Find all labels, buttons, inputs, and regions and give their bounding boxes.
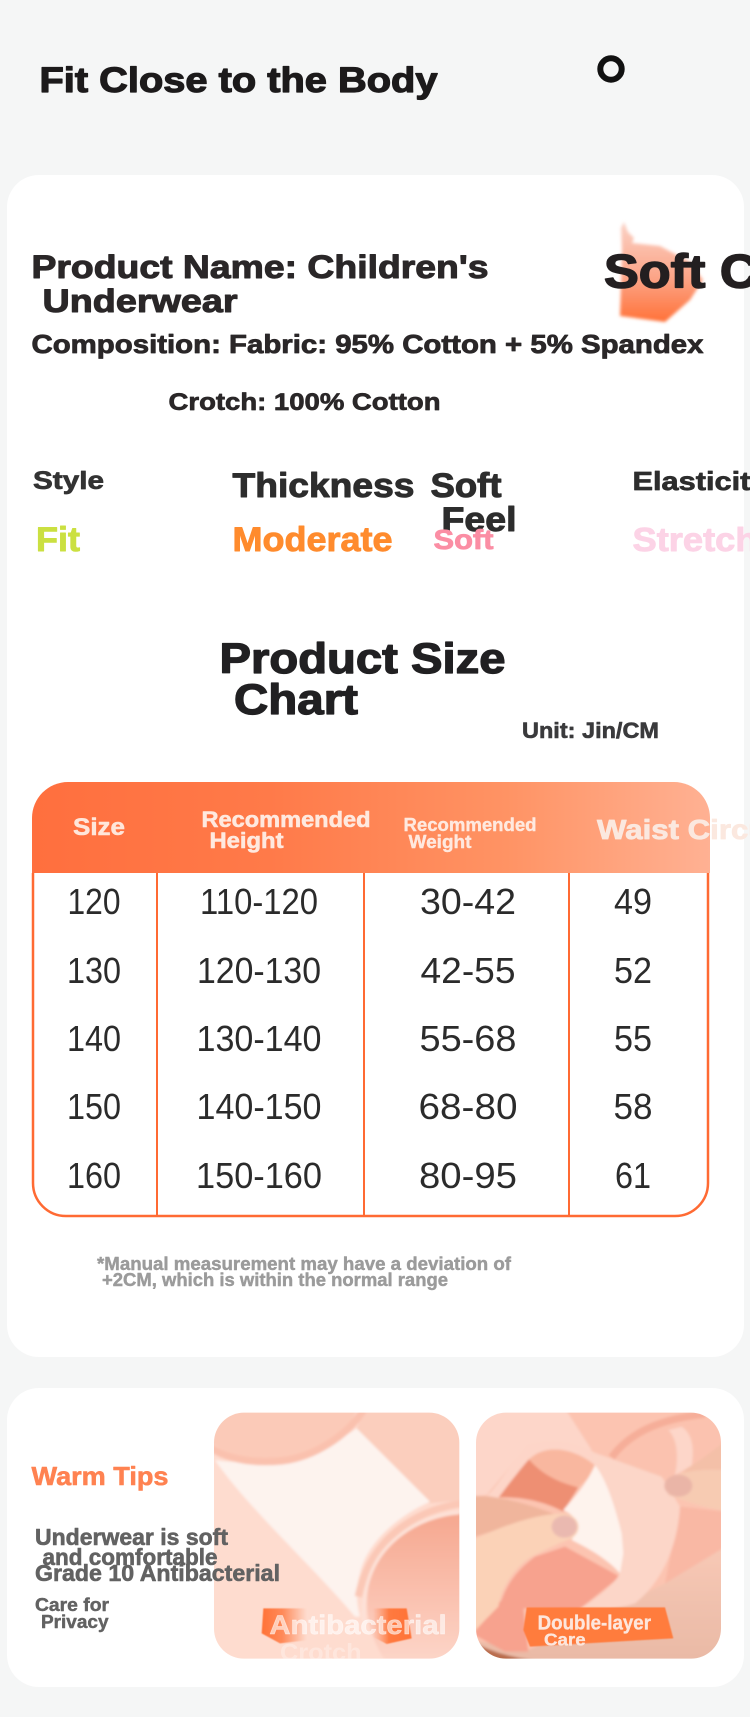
table row 120: 110-120 (200, 881, 318, 922)
photo: double-layer care (472, 1408, 728, 1663)
tip: care for privacy (35, 1594, 109, 1632)
attribute: soft feel: Soft (430, 467, 502, 505)
orange label strip (262, 1608, 412, 1644)
card background (7, 175, 744, 1357)
attribute: thickness (232, 467, 414, 559)
table row 160: 61 (615, 1155, 651, 1196)
label text: Antibacterial (269, 1610, 447, 1640)
table row 120: 120 (68, 881, 120, 922)
icon: orange fabric swatch (620, 222, 703, 322)
table row 140 (67, 1018, 652, 1059)
header labels: Size (73, 814, 125, 841)
table row 120: 49 (614, 881, 652, 922)
size table (32, 782, 750, 1216)
attribute: soft feel: Feel (442, 501, 516, 539)
table row 150: 150 (67, 1086, 121, 1127)
measurement note: *Manual measurement may have a deviation of (97, 1254, 512, 1274)
table row 130 (67, 950, 652, 991)
table header band (32, 782, 710, 873)
table row 140: 130-140 (196, 1018, 322, 1059)
photo fabric and hands drawing (472, 1408, 728, 1663)
attribute: elasticity: Elasticity (632, 466, 750, 496)
label text (538, 1614, 651, 1646)
panel: warm tips (7, 1388, 744, 1687)
table row 150: 140-150 (196, 1086, 322, 1127)
photo: antibacterial crotch (210, 1410, 463, 1667)
product name heading: Product Name: Children's (32, 249, 488, 285)
attribute: style: Style (33, 467, 104, 495)
product name heading: Underwear (42, 283, 238, 319)
attribute: soft feel: Soft (434, 524, 494, 555)
table row 130: 130 (67, 950, 121, 991)
label text: Crotch (280, 1640, 362, 1667)
table row 130: 120-130 (197, 950, 321, 991)
table row 130: 42-55 (420, 950, 516, 991)
orange label strip (523, 1607, 673, 1647)
attribute: style: Fit (36, 521, 80, 559)
attribute: thickness: Moderate (232, 521, 392, 559)
tip: care for privacy: Care for (35, 1594, 109, 1615)
card background (7, 1388, 744, 1687)
unit label: Unit: Jin/CM (522, 718, 659, 743)
warm tips heading: Warm Tips (32, 1461, 168, 1491)
measurement note: +2CM, which is within the normal range (102, 1270, 448, 1290)
table row 120 (68, 881, 652, 922)
table row 140: 140 (67, 1018, 121, 1059)
table row 160 (67, 1155, 651, 1196)
header labels (73, 807, 750, 853)
tip: care for privacy: Privacy (41, 1611, 109, 1632)
icon: black ring (600, 58, 622, 80)
label text (270, 1614, 445, 1658)
table outline and column dividers (33, 873, 708, 1216)
tip: soft and comfortable: and comfortable (42, 1544, 218, 1570)
table row 160: 150-160 (196, 1155, 322, 1196)
composition text: Composition: Fabric: 95% Cotton + 5% Spandex (32, 329, 704, 359)
photo fabric drawing (210, 1410, 463, 1663)
measurement note (97, 1254, 512, 1290)
attribute: elasticity (632, 466, 750, 558)
size chart heading: Product Size (220, 635, 506, 683)
composition text (32, 329, 704, 416)
attribute: thickness: Thickness (232, 467, 414, 505)
table row 120: 30-42 (420, 881, 516, 922)
table row 140: 55-68 (420, 1018, 516, 1059)
panel: product details and size chart (7, 175, 750, 1357)
header labels: Recommended (404, 814, 536, 835)
table row 160: 160 (67, 1155, 121, 1196)
tip: antibacterial: Grade 10 Antibacterial (35, 1560, 280, 1586)
composition text: Crotch: 100% Cotton (168, 389, 440, 416)
table row 150 (67, 1086, 652, 1127)
attribute: style (33, 467, 104, 559)
product name heading (32, 249, 488, 319)
label text: Care (544, 1630, 586, 1650)
table row 130: 52 (614, 950, 652, 991)
title: Fit Close to the Body (40, 61, 438, 100)
table row 160: 80-95 (419, 1155, 517, 1196)
header labels: Recommended (202, 807, 370, 832)
label text: Double-layer (538, 1612, 651, 1634)
size chart heading: Chart (234, 676, 358, 724)
attribute: elasticity: Stretch (632, 521, 750, 558)
header labels: Weight (408, 831, 472, 852)
table row 150: 68-80 (418, 1086, 518, 1127)
table row 150: 58 (614, 1086, 652, 1127)
size chart heading (220, 635, 506, 724)
tip: soft and comfortable: Underwear is soft (35, 1524, 228, 1550)
header labels: Height (210, 828, 284, 853)
table row 140: 55 (614, 1018, 652, 1059)
tip: soft and comfortable (35, 1524, 228, 1570)
attribute: soft feel (430, 467, 516, 555)
